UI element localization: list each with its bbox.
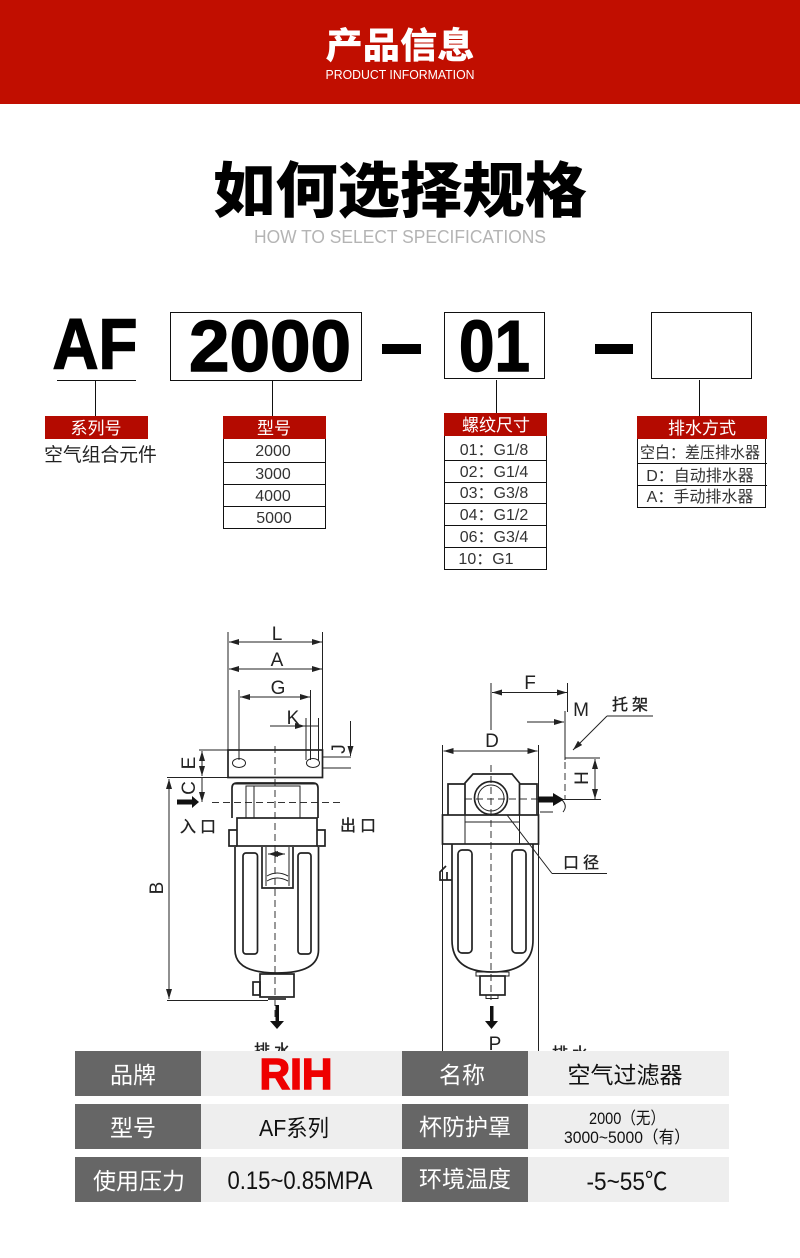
filter bowl (235, 847, 318, 973)
row: brand and name: 品牌 (110, 1062, 156, 1088)
row: model and cup guard (75, 1104, 729, 1149)
model size table: 3000 (255, 466, 291, 483)
drain label: 排水 (552, 1045, 592, 1063)
row: pressure and temperature (75, 1157, 729, 1202)
row: pressure and temperature: 0.15~0.85MPA (228, 1167, 373, 1195)
drain arrow (485, 1006, 498, 1029)
inlet and outlet labels: 入口 (180, 819, 220, 836)
thread size table: 04：G1/2 (460, 507, 528, 524)
series column: 系列号 (70, 419, 122, 438)
mounting bracket (228, 750, 322, 778)
model size table: 2000 (255, 443, 291, 460)
dimension letters: L (272, 624, 282, 645)
drain type table: D：自动排水器 (646, 467, 754, 485)
model size table: 5000 (256, 510, 292, 527)
filter head (442, 774, 538, 844)
inlet arrow (177, 796, 199, 808)
dimension lines (442, 683, 653, 1052)
dimension drawing: side view (440, 673, 653, 1063)
brand logo: RIH (260, 1050, 332, 1099)
row: brand and name: 名称 (439, 1062, 485, 1088)
model size table: 型号 (257, 419, 291, 438)
row: model and cup guard: 型号 (110, 1115, 156, 1141)
header banner (0, 0, 800, 104)
filter head (229, 783, 325, 846)
row: model and cup guard: AF系列 (259, 1115, 329, 1141)
dimension letters: P (489, 1034, 501, 1055)
section heading: 如何选择规格 (213, 158, 587, 225)
row: pressure and temperature: -5~55℃ (586, 1168, 668, 1196)
thread size table: 06：G3/4 (460, 529, 528, 546)
thread size table: 03：G3/8 (460, 485, 528, 502)
row: pressure and temperature: 使用压力 (93, 1168, 185, 1194)
drain fitting (253, 974, 294, 1000)
dimension letters: D (485, 731, 499, 752)
row: pressure and temperature: 环境温度 (419, 1166, 511, 1192)
series description: 空气组合元件 (44, 444, 157, 465)
thread size table: 01：G1/8 (460, 442, 528, 459)
model code: size box 2000 (170, 307, 362, 416)
dimension letters: A (271, 650, 284, 671)
drain arrow (270, 1005, 284, 1029)
inlet and outlet labels: 出口 (340, 817, 380, 835)
port label: 口径 (563, 854, 603, 872)
model code: port box 01: 01 (459, 307, 530, 387)
dimension letters (485, 673, 593, 1055)
model code: series AF: AF (52, 306, 138, 384)
dimension drawing: front view (147, 624, 380, 1060)
dimension letters: M (573, 700, 589, 721)
model code: size box 2000: 2000 (189, 307, 351, 387)
dash separator (382, 344, 421, 354)
dimension letters: K (287, 708, 300, 729)
specification table (75, 1050, 729, 1202)
section subtitle: HOW TO SELECT SPECIFICATIONS (254, 227, 546, 247)
dimension lines (167, 632, 351, 1022)
model code: port box 01 (444, 307, 544, 413)
model code: empty drain box (652, 312, 752, 416)
bracket label: 托架 (612, 696, 652, 714)
dimension letters: C (179, 781, 200, 795)
dimension letters: J (329, 744, 350, 754)
thread size table (444, 413, 547, 570)
thread size table: 02：G1/4 (460, 464, 528, 481)
model code: series AF (52, 306, 138, 416)
row: brand and name: 空气过滤器 (568, 1062, 682, 1088)
dimension letters: E (179, 757, 200, 769)
dimension letters: F (524, 673, 536, 694)
row: model and cup guard: 3000~5000（有） (564, 1128, 690, 1147)
filter bowl (440, 844, 533, 972)
thread size table: 螺纹尺寸 (462, 416, 530, 435)
inlet and outlet labels (180, 817, 380, 836)
drain type table: 排水方式 (668, 419, 736, 438)
drain fitting (476, 972, 509, 998)
banner title: 产品信息 (326, 25, 474, 66)
thread size table: 10：G1 (458, 551, 514, 568)
dimension letters: G (271, 678, 285, 699)
drain label: 排水 (254, 1042, 294, 1060)
row: model and cup guard: 2000（无） (589, 1109, 665, 1128)
outlet arrow (538, 793, 565, 812)
model size table (223, 416, 326, 528)
row: model and cup guard: 杯防护罩 (419, 1114, 511, 1140)
dimension letters (147, 624, 350, 894)
dimension letters: B (147, 882, 168, 894)
series column (44, 416, 157, 465)
drain type table: A：手动排水器 (647, 488, 753, 506)
drain type table (637, 416, 767, 508)
model size table: 4000 (255, 488, 291, 505)
drain type table: 空白：差压排水器 (640, 444, 760, 462)
row: brand and name (75, 1050, 729, 1099)
dimension letters: H (572, 771, 593, 785)
dash separator (595, 344, 633, 354)
banner subtitle: PRODUCT INFORMATION (326, 67, 474, 82)
